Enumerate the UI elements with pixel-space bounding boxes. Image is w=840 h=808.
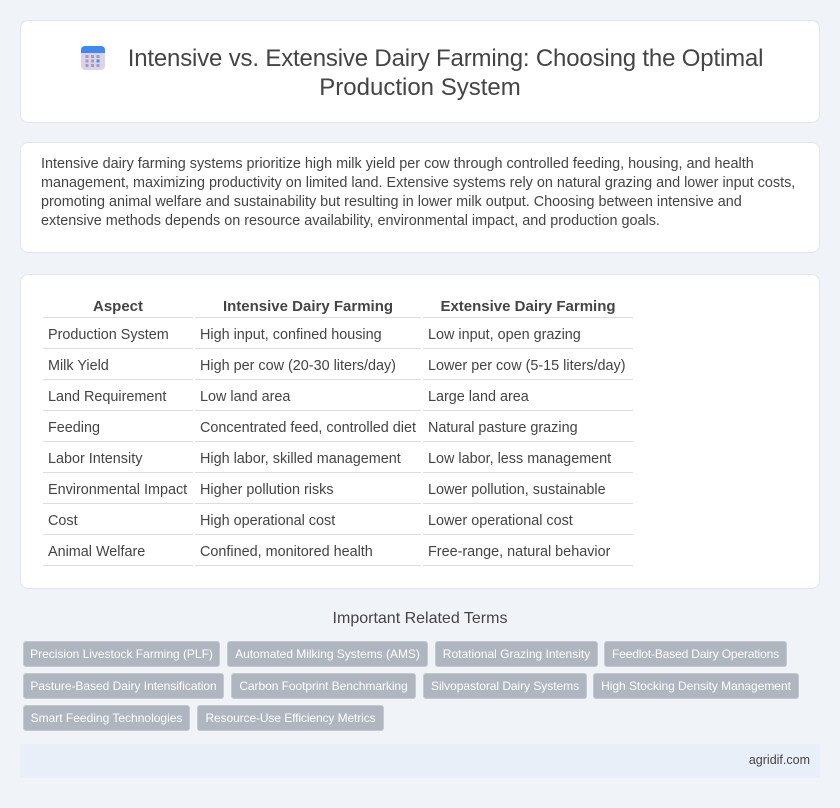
intro text: promoting animal welfare and sustainability but resulting in lower milk output. Choosing between intensive and — [41, 194, 742, 210]
comparison table: Free-range, natural behavior — [428, 544, 610, 560]
related term tags: Silvopastoral Dairy Systems — [431, 679, 579, 693]
comparison table: Lower pollution, sustainable — [428, 482, 606, 498]
comparison table: Labor Intensity — [48, 451, 142, 467]
comparison table: Cost — [48, 513, 78, 529]
related term tags: High Stocking Density Management — [601, 679, 791, 693]
comparison table: Low land area — [200, 389, 290, 405]
related term tags: Carbon Footprint Benchmarking — [239, 679, 408, 693]
comparison table: Low labor, less management — [428, 451, 611, 467]
title: Intensive vs. Extensive Dairy Farming: Choosing the Optimal — [128, 45, 763, 72]
comparison table: Natural pasture grazing — [428, 420, 578, 436]
comparison table: Milk Yield — [48, 358, 109, 374]
comparison table: Extensive Dairy Farming — [440, 298, 616, 315]
related term tags: Feedlot-Based Dairy Operations — [612, 647, 779, 661]
comparison table: Feeding — [48, 420, 100, 436]
intro text: Intensive dairy farming systems prioritize high milk yield per cow through controlled feeding, housing, and health — [41, 156, 754, 172]
related term tags: Smart Feeding Technologies — [31, 711, 182, 725]
comparison table: Confined, monitored health — [200, 544, 373, 560]
comparison table: Lower operational cost — [428, 513, 573, 529]
comparison table: High input, confined housing — [200, 327, 382, 343]
related term tags: Pasture-Based Dairy Intensification — [30, 679, 217, 693]
comparison table: Intensive Dairy Farming — [223, 298, 393, 315]
intro text: extensive methods depends on resource availability, environmental impact, and production goals. — [41, 213, 660, 229]
icon: calendar — [81, 46, 105, 70]
title — [128, 45, 763, 101]
comparison table: Aspect — [93, 298, 143, 315]
comparison table — [43, 298, 633, 566]
comparison table: Production System — [48, 327, 169, 343]
related term tags: Automated Milking Systems (AMS) — [235, 647, 420, 661]
footer bar — [20, 744, 820, 778]
panel: intro — [20, 142, 820, 253]
intro text — [41, 156, 795, 229]
footer source: agridif.com — [749, 753, 810, 767]
panel: header — [20, 20, 820, 123]
comparison table: Land Requirement — [48, 389, 166, 405]
comparison table: High operational cost — [200, 513, 335, 529]
comparison table: Animal Welfare — [48, 544, 145, 560]
related term tags: Resource-Use Efficiency Metrics — [205, 711, 376, 725]
comparison table: Lower per cow (5-15 liters/day) — [428, 358, 626, 374]
related term tags: Rotational Grazing Intensity — [443, 647, 590, 661]
intro text: management, maximizing productivity on limited land. Extensive systems rely on natural grazing and lower input costs, — [41, 175, 795, 191]
comparison table: High labor, skilled management — [200, 451, 401, 467]
comparison table: Large land area — [428, 389, 529, 405]
related term tags — [23, 641, 799, 731]
comparison table: Environmental Impact — [48, 482, 187, 498]
comparison table: Higher pollution risks — [200, 482, 334, 498]
heading: related terms: Important Related Terms — [333, 610, 507, 627]
comparison table: Low input, open grazing — [428, 327, 581, 343]
panel: comparison table — [20, 274, 820, 589]
title: Production System — [319, 74, 521, 101]
comparison table: Concentrated feed, controlled diet — [200, 420, 416, 436]
comparison table: High per cow (20-30 liters/day) — [200, 358, 396, 374]
related term tags: Precision Livestock Farming (PLF) — [30, 647, 213, 661]
